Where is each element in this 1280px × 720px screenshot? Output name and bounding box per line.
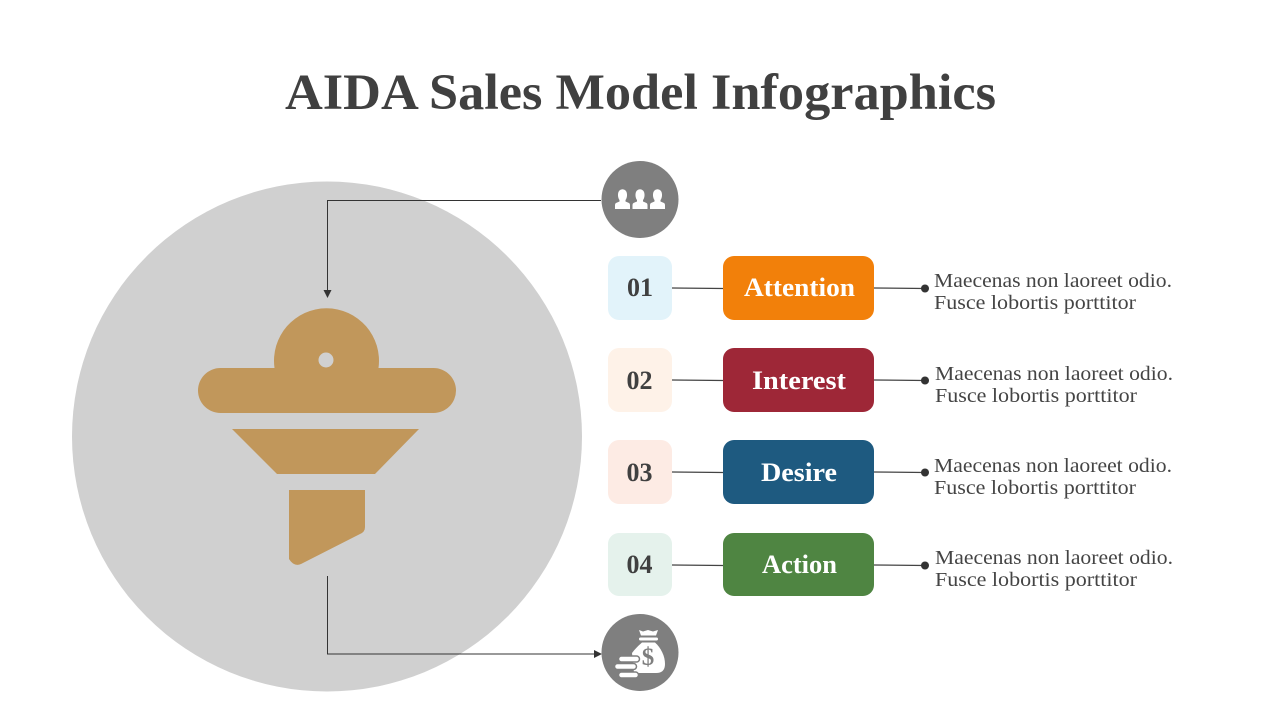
description 02: Maecenas non laoreet odio. — [935, 363, 1173, 385]
label Action: Action — [762, 550, 838, 579]
number box 02: 02 — [626, 366, 652, 395]
label Desire: Desire — [761, 458, 837, 487]
description 01: Fusce lobortis porttitor — [934, 292, 1136, 314]
description 02: Fusce lobortis porttitor — [935, 385, 1137, 407]
icon: people circle — [602, 161, 678, 238]
dollar sign: $ — [642, 644, 654, 671]
description 04: Maecenas non laoreet odio. — [935, 547, 1173, 569]
row 04: Action — [608, 533, 1173, 596]
description 02 — [935, 363, 1173, 407]
description 03 — [934, 455, 1172, 499]
label Interest — [723, 348, 874, 412]
arrow: top icon to funnel — [324, 200, 601, 298]
icon: money bag circle — [602, 614, 678, 691]
description 03: Fusce lobortis porttitor — [934, 477, 1136, 499]
number box 01 — [608, 256, 672, 320]
label Attention: Attention — [744, 273, 856, 302]
number box 03 — [608, 440, 672, 504]
large grey circle — [72, 182, 582, 692]
description 01: Maecenas non laoreet odio. — [934, 270, 1172, 292]
label Action — [723, 533, 874, 596]
number box 04: 04 — [626, 550, 652, 579]
label Desire — [723, 440, 874, 504]
description 04 — [935, 547, 1173, 591]
number box 04 — [608, 533, 672, 596]
number box 01: 01 — [627, 273, 653, 302]
icon: funnel — [198, 308, 456, 565]
description 04: Fusce lobortis porttitor — [935, 569, 1137, 591]
row 03: Desire — [608, 440, 1172, 504]
title: AIDA Sales Model Infographics — [285, 65, 996, 121]
label Interest: Interest — [752, 366, 846, 395]
row 01: Attention — [608, 256, 1172, 320]
arrow: funnel to bottom icon — [328, 576, 602, 658]
number box 03: 03 — [626, 458, 652, 487]
number box 02 — [608, 348, 672, 412]
label Attention — [723, 256, 874, 320]
row 02: Interest — [608, 348, 1173, 412]
description 03: Maecenas non laoreet odio. — [934, 455, 1172, 477]
description 01 — [934, 270, 1172, 314]
